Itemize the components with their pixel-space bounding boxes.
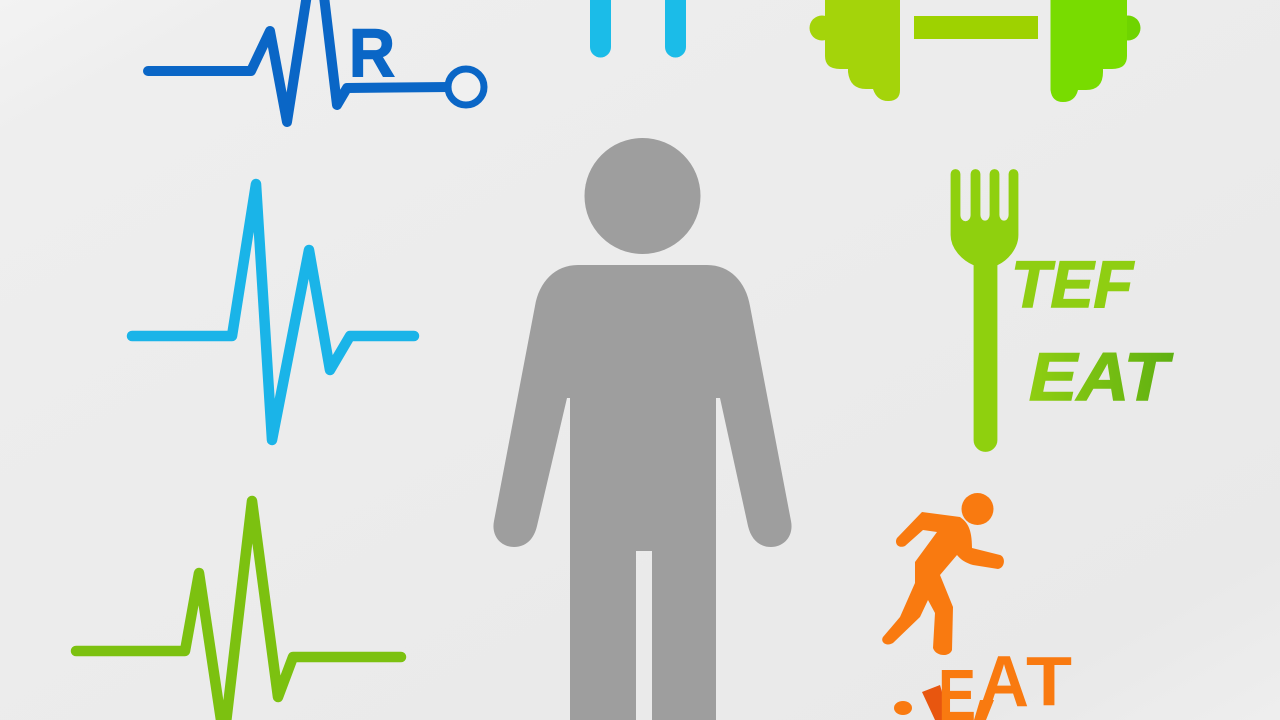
label: EAT green: EAT (1029, 339, 1174, 415)
icon: green heartbeat line (76, 501, 401, 720)
label: broken EAT orange: A (979, 642, 1029, 720)
label: broken EAT orange (894, 642, 1072, 720)
icon: orange running person (882, 493, 1004, 655)
figure: grey standing person (493, 138, 792, 720)
icon: blue heartbeat line with R (148, 0, 484, 122)
icon: cyan bars cropped at top (590, 0, 686, 58)
icon: green fork (951, 170, 1018, 452)
icon: cyan heartbeat line (132, 184, 414, 440)
icon: green dumbbell (810, 0, 1140, 102)
label: broken EAT orange: T (1026, 642, 1072, 720)
label: TEF: TEF (1011, 247, 1135, 321)
icon: blue heartbeat line with R: R (349, 15, 395, 91)
